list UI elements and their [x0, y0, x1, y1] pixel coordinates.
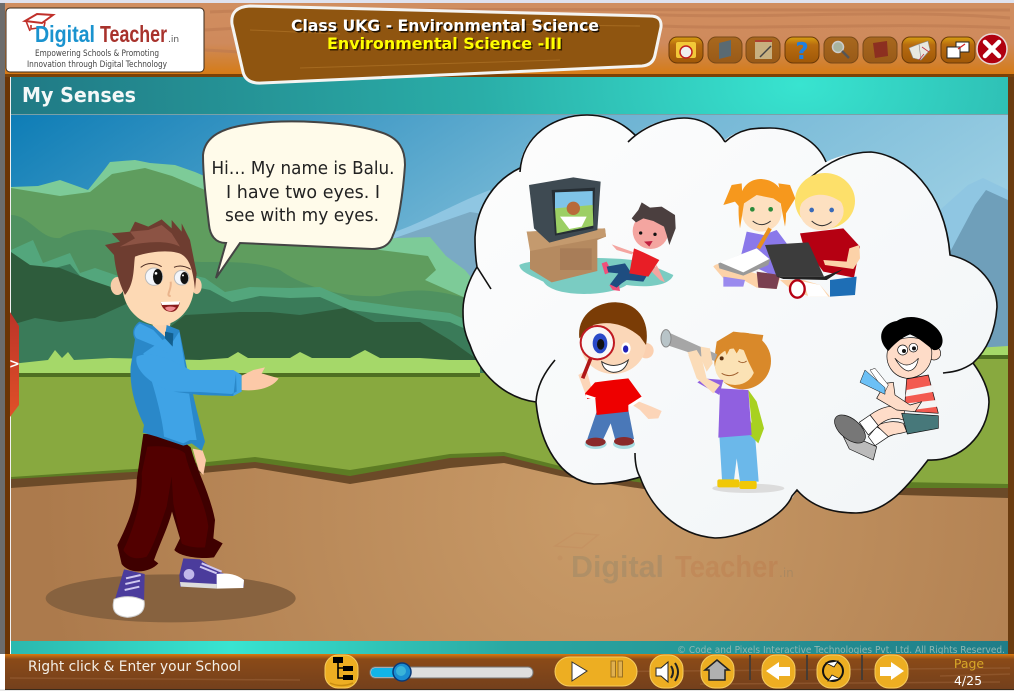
header wood bar — [5, 3, 1014, 77]
neck — [152, 322, 171, 342]
hoodie — [131, 322, 205, 451]
telescope — [667, 333, 717, 361]
heading bar: My Senses: My Senses — [22, 83, 136, 107]
speech bubble: see with my eyes. — [225, 206, 379, 226]
scene: boy watching TV — [519, 177, 676, 294]
icon: tree menu — [325, 655, 358, 688]
page counter — [954, 656, 984, 688]
logo panel: Digital — [35, 21, 95, 47]
scene: boy reading a book — [830, 317, 943, 460]
hair — [105, 219, 197, 295]
hands — [687, 347, 713, 372]
logo panel: Innovation through Digital Technology — [27, 60, 167, 70]
icon: help: ? — [795, 39, 809, 65]
side tab: > — [9, 357, 20, 372]
dividers — [750, 655, 862, 680]
icon: history folder — [669, 37, 703, 63]
heading bar: My Senses — [11, 77, 1008, 114]
logo panel: Teacher — [100, 21, 167, 47]
scene: boy with telescope — [661, 330, 784, 493]
legs — [587, 410, 634, 439]
icon: resize windows — [941, 37, 975, 63]
mouth — [161, 302, 180, 312]
jeans and shoes — [719, 434, 759, 482]
watermark — [555, 533, 794, 584]
thought cloud — [463, 115, 997, 538]
notebook — [718, 248, 770, 276]
logo panel — [6, 8, 204, 72]
page counter: Page — [954, 656, 984, 671]
arm — [688, 352, 720, 393]
icon: forward arrow — [875, 655, 908, 688]
icon: notepad — [746, 37, 780, 63]
speech bubble: Hi… My name is Balu. — [212, 159, 394, 179]
icon: reference book — [708, 37, 742, 63]
icon: open book — [902, 37, 936, 63]
watermark: .in — [779, 566, 794, 580]
striped shirt — [905, 375, 938, 413]
icon: search — [824, 37, 858, 63]
trousers — [117, 434, 223, 571]
girl — [713, 179, 795, 289]
icon: close — [977, 34, 1007, 64]
icon: help — [785, 37, 819, 65]
ears — [111, 277, 124, 295]
bushes — [11, 160, 490, 375]
watermark: Teacher — [675, 549, 778, 584]
scene: boy with magnifying glass — [578, 302, 662, 449]
shirt — [718, 388, 752, 438]
head — [927, 347, 941, 360]
icon: graduation cap — [25, 14, 53, 31]
head — [638, 343, 654, 358]
dirt path — [11, 452, 1008, 500]
play and pause — [555, 657, 637, 686]
toolbar icons — [669, 34, 1007, 65]
laptop — [765, 242, 824, 277]
icon: home — [701, 655, 734, 688]
mountains — [385, 178, 1008, 350]
speech bubble: I have two eyes. I — [226, 183, 380, 203]
logo panel: .in — [168, 35, 179, 45]
back shoe — [179, 558, 244, 589]
title plaque: Environmental Science -III — [327, 34, 562, 53]
bottom teal band — [11, 641, 1008, 656]
scene background — [11, 114, 1008, 650]
magnifier — [583, 358, 591, 378]
title plaque — [232, 6, 661, 83]
icon: refresh — [817, 655, 850, 688]
legs — [843, 434, 877, 460]
arms — [630, 400, 662, 419]
icon: dictionary — [863, 37, 897, 63]
arm and hand — [877, 382, 922, 412]
title plaque: Class UKG - Environmental Science — [291, 16, 599, 35]
logo panel: Empowering Schools & Promoting — [35, 49, 159, 59]
TV cabinet — [527, 228, 606, 282]
book — [870, 368, 888, 392]
character: Balu — [46, 219, 296, 622]
hand — [242, 367, 279, 390]
progress slider — [370, 663, 533, 681]
green field — [11, 373, 500, 490]
watermark: Digital — [571, 549, 664, 584]
icon: speaker — [650, 655, 683, 688]
title plaque: Class UKG - Environmental Science — [292, 18, 601, 36]
backpack — [733, 390, 764, 443]
title plaque: Environmental Science -III — [328, 36, 564, 54]
front shoe — [113, 569, 145, 617]
grass — [11, 350, 480, 376]
speech bubble — [203, 121, 405, 278]
side tab — [9, 312, 20, 417]
bottom control bar — [0, 654, 1014, 691]
boy — [780, 173, 860, 298]
scene: girl and boy with laptop — [713, 173, 860, 298]
icon: back arrow — [762, 655, 795, 688]
status text: Right click & Enter your School — [28, 659, 241, 675]
head — [714, 333, 771, 389]
boy — [602, 202, 676, 291]
left hand — [193, 449, 206, 475]
face — [123, 247, 195, 325]
page counter: 4/25 — [954, 673, 982, 688]
eyes — [145, 268, 163, 285]
television — [529, 177, 601, 243]
